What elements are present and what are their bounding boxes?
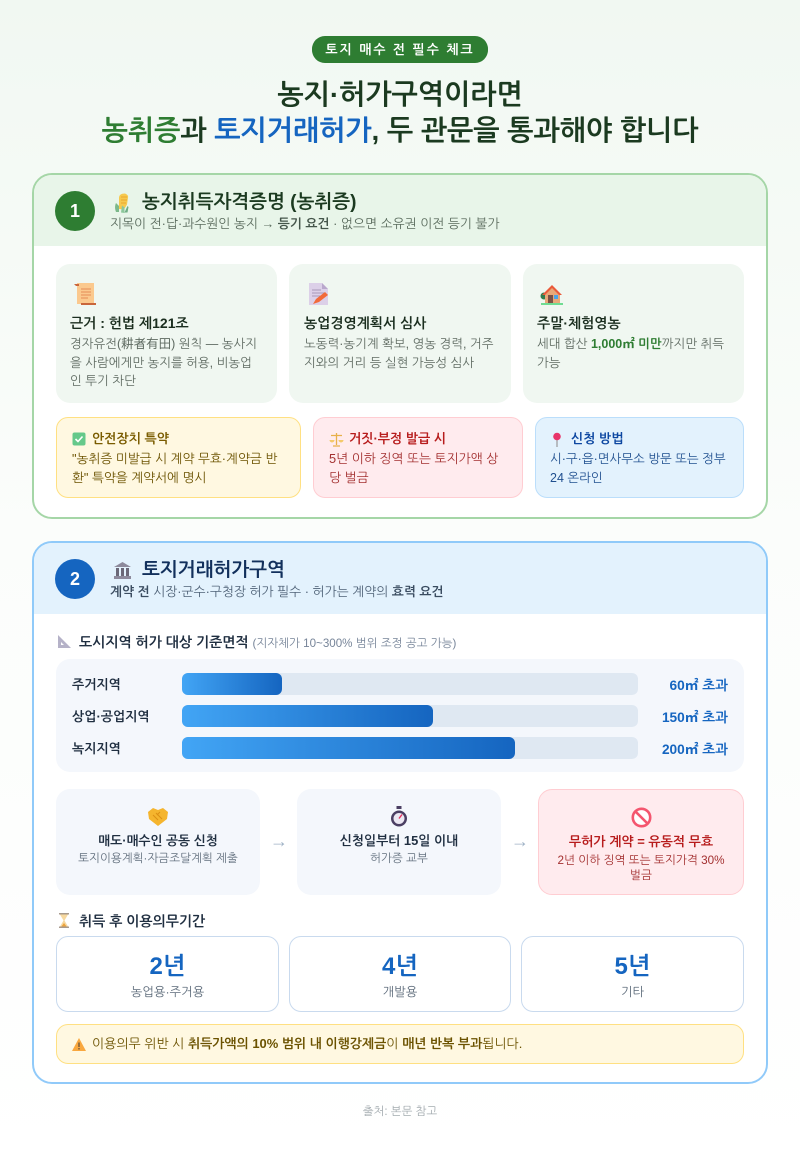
panel: 토지거래허가구역 [32,541,768,1084]
warning text: 이용의무 위반 시 취득가액의 10% 범위 내 이행강제금이 매년 반복 부과됩니다. [92,1036,522,1051]
callout: 신청 방법 [535,417,744,498]
card text: 노동력·농기계 확보, 영농 경력, 거주 [304,337,494,351]
step heading: 무허가 계약 = 유동적 무효 [569,834,713,849]
icon: scales [330,433,344,447]
step number 1: 1 [70,201,80,221]
icon: warning [72,1038,86,1051]
badge [312,37,488,63]
title [102,79,698,146]
card text [537,336,724,370]
callout: 거짓·부정 발급 시 [313,417,523,498]
icon: stopwatch [391,806,407,826]
bar: 주거지역: 주거지역 [72,677,121,692]
card text: 세대 합산 1,000㎡ 미만까지만 취득 [537,337,724,351]
icon: memo [309,283,328,305]
icon: triangle ruler [58,635,71,648]
duration value: 4년 [382,953,418,980]
arrow: → [511,831,529,851]
icon: check [72,432,86,446]
callout: 안전장치 특약 [56,417,301,498]
title: 농취증과 토지거래허가, 두 관문을 통과해야 합니다 [102,114,698,146]
warning callout [56,1024,744,1064]
callout text: 5년 이하 징역 또는 토지가액 상 [329,451,498,466]
step heading: 신청일부터 15일 이내 [340,833,458,848]
step text: 토지이용계획·자금조달계획 제출 [78,852,238,865]
card text [304,337,494,370]
callout text: "농취증 미발급 시 계약 무효·계약금 반 [72,452,277,466]
callout heading: 신청 방법 [571,431,624,446]
panel: 농취증 [32,173,768,519]
callout heading: 안전장치 특약 [92,431,169,446]
bar: 상업·공업지역: 150㎡ 초과 [662,710,728,725]
bar: 주거지역: 60㎡ 초과 [670,678,728,693]
step text: 2년 이하 징역 또는 토지가격 30% [558,854,724,867]
callout text: 시·구·읍·면사무소 방문 또는 정부 [550,452,726,466]
callout text [550,452,726,484]
icon: house [540,285,563,305]
flow step: 공동 신청 [56,789,260,895]
footer source: 출처: 본문 참고 [363,1106,437,1118]
icon: scroll [74,283,96,305]
step text: 허가증 교부 [370,852,428,865]
card heading: 근거 : 헌법 제121조 [70,315,189,331]
flow step: 무허가 계약 [538,789,744,895]
callout text: 당 벌금 [329,470,369,484]
icon: bank [114,562,131,579]
card heading: 주말·체험영농 [537,315,621,331]
duration label: 기타 [621,985,644,999]
bar: 주거지역 [72,673,728,695]
flow step: 15일 이내 [297,789,501,895]
section heading: 이용의무기간: 취득 후 이용의무기간 [79,913,205,929]
panel heading: 농지취득자격증명 (농취증) [142,192,356,213]
card text: 을 사람에게만 농지를 허용, 비농업 [70,356,252,370]
panel subtitle: 지목이 전·답·과수원인 농지 → 등기 요건 · 없으면 소유권 이전 등기 불가 [110,216,500,231]
card text: 지와의 거리 등 실현 가능성 심사 [304,356,474,370]
card: 농업경영계획서 [289,264,511,403]
title: 농지·허가구역이라면 [277,79,523,110]
card: 근거 [56,264,277,403]
icon: handshake [148,808,168,826]
panel header [34,175,766,246]
duration label: 농업용·주거용 [131,985,204,999]
duration label: 개발용 [383,985,417,999]
card text: 인 투기 차단 [70,374,136,388]
step text: 벌금 [630,868,652,882]
card text: 경자유전(耕者有田) 원칙 — 농사지 [70,337,257,351]
callout text [329,451,498,484]
bar chart [56,659,744,772]
card text: 가능 [537,356,561,370]
step heading: 매도·매수인 공동 신청 [98,833,218,848]
card: 주말체험영농 [523,264,744,403]
card heading: 농업경영계획서 심사 [304,315,426,331]
step number 2: 2 [70,569,80,589]
callout heading: 거짓·부정 발급 시 [349,431,446,446]
duration value: 5년 [615,953,650,980]
duration card: 4년 [289,936,511,1012]
callout text [72,452,278,484]
icon: prohibited [632,808,652,828]
bar: 상업·공업지역: 상업·공업지역 [72,709,150,724]
panel header [34,543,766,614]
badge: 토지 매수 전 필수 체크 [325,42,475,57]
callout text: 환" 특약을 계약서에 명시 [72,470,206,484]
bar: 녹지지역: 녹지지역 [72,741,121,756]
bar: 녹지지역: 200㎡ 초과 [662,742,728,757]
bar: 상업·공업지역 [72,705,728,727]
callout text: 24 온라인 [550,470,603,484]
arrow: → [270,831,288,851]
step number 2 [55,559,95,599]
card text [70,337,257,388]
icon: pin [553,432,561,447]
duration card: 2년 [56,936,279,1012]
panel heading: 토지거래허가구역 [142,560,285,581]
icon: corn [115,194,128,213]
duration value: 2년 [150,953,185,980]
section heading: 기준면적: 도시지역 허가 대상 기준면적 (지자체가 10~300% 범위 조정 공고 가능) [79,634,456,650]
bar: 녹지지역 [72,737,728,759]
step text [558,854,724,882]
panel subtitle: 계약 전 시장·군수·구청장 허가 필수 · 허가는 계약의 효력 요건 [110,584,444,599]
icon: hourglass [59,913,69,928]
step number 1 [55,191,95,231]
duration card: 5년 [521,936,744,1012]
